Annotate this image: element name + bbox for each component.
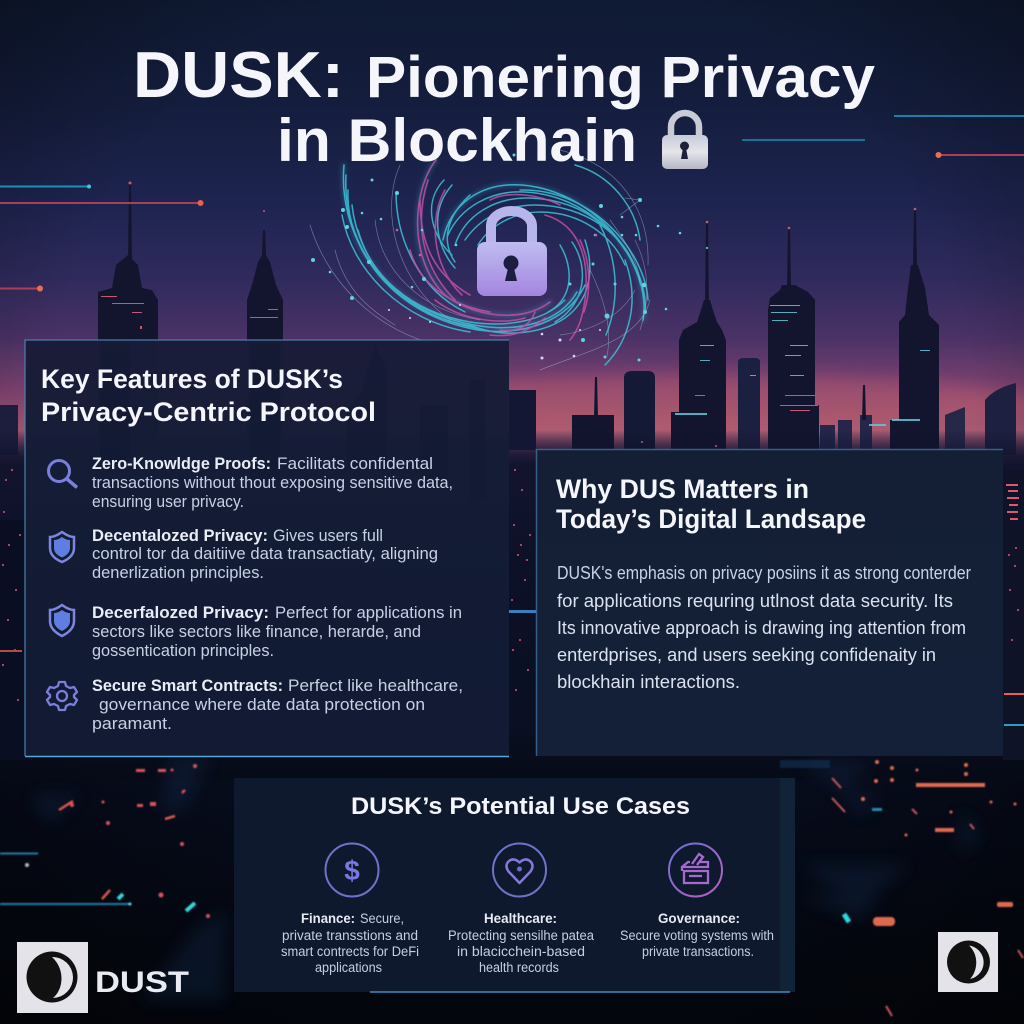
text block: why DUSK matters: blockhain interactions. — [557, 672, 740, 692]
feature: decentralized privacy second — [92, 604, 462, 660]
panel: use cases — [234, 778, 795, 992]
use case: finance: smart contrects for DeFi — [281, 944, 419, 959]
icon: dollar: $ — [344, 855, 360, 886]
icon: ballot box — [669, 844, 722, 896]
title: Pionering Privacy — [366, 45, 875, 110]
text block: why DUSK matters: for applications requring utlnost data security. Its — [557, 591, 953, 611]
use case: finance: applications — [315, 960, 382, 975]
heading: key features — [41, 364, 376, 427]
use case: governance: Governance: — [658, 911, 740, 926]
skyline window lights — [101, 182, 916, 447]
icon: gear — [47, 682, 77, 710]
text block: why DUSK matters: Its innovative approach is drawing ing attention from — [557, 618, 966, 638]
title: DUSK: — [133, 38, 344, 111]
use case: finance: Finance: — [301, 911, 355, 926]
panel: key features — [25, 340, 509, 756]
text block: why DUSK matters: DUSK's emphasis on privacy posiins it as strong conterder — [557, 563, 971, 583]
skyline silhouette — [0, 183, 1016, 460]
data swirl: particles — [311, 154, 681, 362]
heading: use cases: DUSK’s Potential Use Cases — [351, 793, 690, 820]
use case: healthcare: health records — [479, 960, 559, 975]
logo: right — [938, 932, 998, 992]
feature: decentralized privacy: denerlization principles. — [92, 564, 264, 582]
icon: dollar — [326, 844, 378, 896]
data swirl — [310, 150, 650, 370]
icon: title lock — [662, 113, 708, 169]
text block: why DUSK matters: enterdprises, and users seeking confidenaity in — [557, 645, 936, 665]
use case: governance — [620, 911, 774, 959]
logo: DUST left — [17, 942, 189, 1013]
heading: key features: Key Features of DUSK’s — [41, 364, 343, 394]
icon: shield — [50, 605, 74, 636]
icon: heart — [493, 844, 546, 896]
feature: zero-knowledge proofs: transactions without thout exposing sensitive data, — [92, 474, 453, 492]
text block: why DUSK matters — [557, 563, 971, 692]
use case: governance: private transactions. — [642, 944, 754, 959]
icon: central purple lock — [477, 211, 547, 296]
feature: decentralized privacy: Gives users full — [273, 527, 383, 545]
use case: finance: private transstions and — [282, 928, 418, 943]
use case: healthcare: in blacicchein-based — [457, 944, 585, 959]
lower city: blue streaks and lights — [0, 756, 1023, 1016]
feature: decentralized privacy second: gossentication principles. — [92, 642, 274, 660]
feature: secure smart contracts — [92, 677, 463, 733]
use case: healthcare: Protecting sensilhe patea — [448, 928, 594, 943]
icon: shield — [50, 532, 74, 562]
title: in Blockhain — [277, 107, 637, 174]
feature: secure smart contracts: Secure Smart Contracts: — [92, 677, 283, 695]
use case: healthcare: Healthcare: — [484, 911, 557, 926]
feature: decentralized privacy second: sectors like sectors like finance, herarde, and — [92, 623, 421, 641]
use case: governance: Secure voting systems with — [620, 928, 774, 943]
feature: zero-knowledge proofs: Facilitats confidental — [277, 455, 433, 473]
feature: decentralized privacy second: Decerfalozed Privacy: — [92, 604, 269, 622]
feature: zero-knowledge proofs — [92, 455, 453, 511]
heading: why DUSK matters — [556, 474, 866, 534]
city at night: lower band — [0, 390, 1024, 780]
feature: zero-knowledge proofs: Zero-Knowldge Proofs: — [92, 455, 271, 473]
feature: secure smart contracts: governance where date data protection on — [99, 696, 425, 714]
use case: finance: Secure, — [360, 911, 404, 926]
icon: magnifier — [48, 460, 77, 488]
heading: key features: Privacy-Centric Protocol — [41, 397, 376, 427]
feature: secure smart contracts: paramant. — [92, 715, 172, 733]
use case: healthcare — [448, 911, 594, 975]
light trails — [0, 116, 1024, 292]
logo: DUST left: DUST — [95, 966, 189, 999]
title — [133, 38, 875, 174]
feature: decentralized privacy: control tor da daitiive data transactiaty, aligning — [92, 545, 438, 563]
feature: zero-knowledge proofs: ensuring user privacy. — [92, 493, 244, 511]
heading: why DUSK matters: Today’s Digital Landsape — [556, 504, 866, 534]
use case: finance — [281, 911, 419, 975]
feature: decentralized privacy — [92, 527, 438, 582]
feature: secure smart contracts: Perfect like healthcare, — [288, 677, 463, 695]
feature: decentralized privacy: Decentalozed Privacy: — [92, 527, 268, 545]
feature: decentralized privacy second: Perfect for applications in — [275, 604, 462, 622]
heading: why DUSK matters: Why DUS Matters in — [556, 474, 809, 504]
panel: why DUSK matters — [536, 449, 1003, 756]
